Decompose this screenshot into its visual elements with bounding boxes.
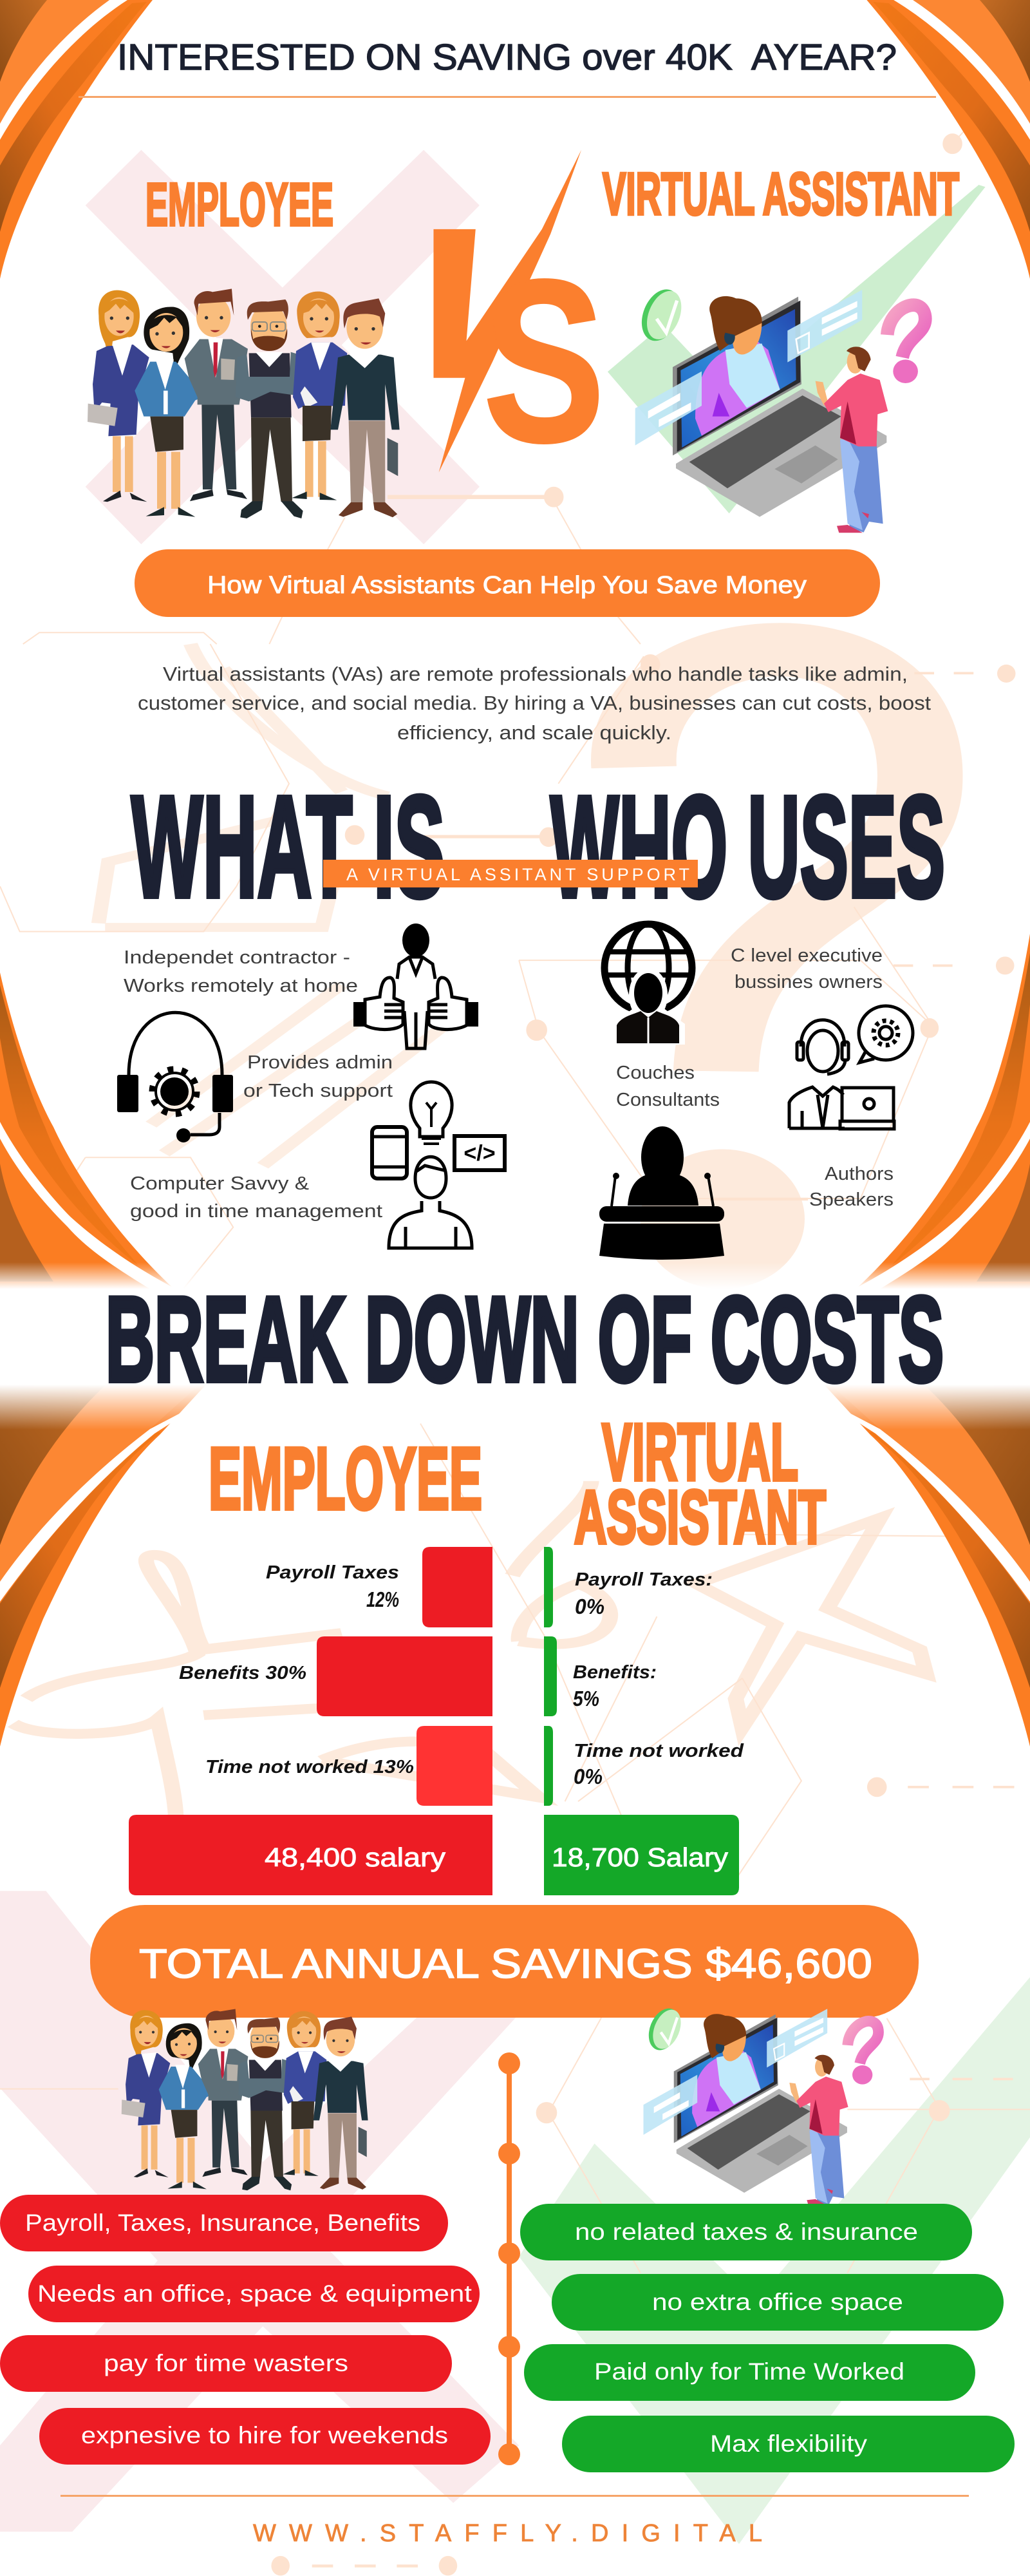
icon: speaker at podium: [599, 1126, 724, 1260]
bar: time not worked 0%: Time not worked: [574, 1741, 744, 1761]
text: authors speakers: Speakers: [809, 1189, 894, 1210]
icon: headset with gear: [117, 1012, 233, 1142]
text: computer savvy: good in time management: [130, 1201, 382, 1222]
pill: no related taxes: no related taxes & insurance: [575, 2219, 918, 2245]
heading: virtual assistant column: [574, 1408, 826, 1559]
icon: support agent with gear: [789, 1006, 913, 1129]
chart: employee cost bars: [129, 1547, 492, 1895]
bar: 48,400 salary: [129, 1815, 492, 1895]
background: pale pink X bottom: [0, 1891, 519, 2532]
text: computer savvy: [130, 1173, 382, 1222]
bar: payroll taxes 12%: Payroll Taxes: [266, 1562, 399, 1583]
pill: payroll taxes insurance benefits: [0, 2195, 448, 2251]
title: INTERESTED ON SAVING over 40K AYEAR?: [117, 37, 897, 78]
corner swoosh: lower right: [818, 1385, 1030, 1747]
pill: no extra office space: no extra office space: [652, 2289, 903, 2315]
VS emblem: [433, 150, 605, 491]
employee drawbacks list: [0, 2195, 491, 2465]
pill: no extra office space: [552, 2274, 1004, 2331]
timeline divider: [498, 2052, 520, 2465]
chart: virtual assistant cost bars: [544, 1547, 744, 1895]
text: couches consultants: Consultants: [616, 1090, 720, 1110]
intro paragraph: Virtual assistants (VAs) are remote professionals who handle tasks like admin,: [163, 663, 908, 685]
background: hand-drawn X outlines lower: [13, 1481, 926, 1863]
banner: total annual savings: TOTAL ANNUAL SAVINGS $46,600: [139, 1940, 872, 1987]
pill: no related taxes: [520, 2204, 972, 2260]
intro paragraph: [138, 663, 931, 744]
bar: benefits 5%: 5%: [573, 1687, 599, 1710]
tag: a virtual assistant support: [323, 860, 698, 887]
background: pale question mark: [633, 650, 920, 1289]
text: provides admin: [243, 1052, 393, 1101]
bar: 48,400 salary: 48,400 salary: [265, 1842, 446, 1872]
pill: paid only for time worked: Paid only for Time Worked: [594, 2358, 904, 2385]
heading: virtual assistant column: ASSISTANT: [574, 1475, 826, 1559]
corner swoosh: top left: [0, 0, 153, 279]
pill: pay for time wasters: pay for time wasters: [104, 2350, 348, 2376]
bar: time not worked 0%: [544, 1726, 744, 1806]
footer rule: [61, 2495, 969, 2497]
text: c level executive: bussines owners: [735, 972, 883, 992]
footer website: WWW.STAFFLY.DIGITAL: [253, 2520, 762, 2547]
background: pale green check top: [608, 185, 986, 513]
heading: virtual assistant column: VIRTUAL: [602, 1408, 798, 1497]
pill: payroll taxes insurance benefits: Payroll, Taxes, Insurance, Benefits: [25, 2210, 420, 2236]
pill: pay for time wasters: [0, 2335, 452, 2392]
text: provides admin: or Tech support: [243, 1081, 393, 1101]
heading: employee: EMPLOYEE: [145, 171, 333, 239]
icon: person thumbs up: [353, 923, 478, 1048]
bar: payroll taxes 12%: [266, 1547, 492, 1627]
pill: max flexibility: [562, 2416, 1015, 2472]
background: pale pink X top: [86, 150, 480, 544]
banner: how VAs help: How Virtual Assistants Can Help You Save Money: [207, 572, 807, 599]
bar: 18,700 salary: 18,700 Salary: [552, 1842, 729, 1872]
bar: payroll taxes 0%: 0%: [575, 1595, 604, 1618]
banner: how VAs help: [135, 549, 880, 617]
background: network dots and dashes: [271, 133, 1016, 2575]
bar: time not worked 13%: [205, 1726, 492, 1806]
text: independent contractor: [124, 947, 358, 996]
icon: tech worker with bulb and code: </>: [464, 1141, 496, 1166]
intro paragraph: customer service, and social media. By hiring a VA, businesses can cut costs, boost: [138, 692, 931, 714]
icon: executive with globe: [604, 924, 692, 1045]
pill: needs an office: [28, 2266, 480, 2322]
illustration: virtual assistant laptop: [635, 283, 925, 533]
corner swoosh: middle left: [0, 972, 187, 1298]
bar: time not worked 0%: 0%: [574, 1765, 603, 1788]
bar: benefits 30%: [179, 1636, 492, 1716]
text: independent contractor: Works remotely at home: [124, 976, 358, 996]
text: couches consultants: [616, 1063, 720, 1110]
tag: a virtual assistant support: A VIRTUAL ASSITANT SUPPORT: [346, 865, 689, 884]
icon: tech worker with bulb and code: [372, 1082, 505, 1248]
VS emblem: S: [483, 232, 605, 491]
illustration: virtual assistant laptop small: [643, 2003, 879, 2206]
bar: time not worked 13%: Time not worked 13%: [205, 1757, 414, 1777]
bar: benefits 30%: Benefits 30%: [179, 1663, 306, 1683]
intro paragraph: efficiency, and scale quickly.: [397, 721, 671, 744]
banner: total annual savings: [90, 1905, 919, 2018]
text: independent contractor: Independet contractor -: [124, 947, 350, 968]
text: couches consultants: Couches: [616, 1063, 695, 1083]
virtual assistant benefits list: [520, 2204, 1015, 2472]
pill: paid only for time worked: [524, 2344, 975, 2401]
text: authors speakers: [809, 1164, 894, 1210]
pill: max flexibility: Max flexibility: [710, 2430, 868, 2457]
bar: benefits 5%: [544, 1636, 657, 1716]
title rule: [79, 96, 936, 98]
background: hand-drawn X outlines middle: [98, 644, 460, 1166]
corner swoosh: top right: [866, 0, 1030, 279]
text: c level executive: [731, 945, 883, 992]
text: computer savvy: Computer Savvy &: [130, 1173, 309, 1194]
corner swoosh: lower left: [0, 1385, 212, 1747]
pill: expensive for weekends: expnesive to hire for weekends: [81, 2422, 448, 2448]
background: pale green check bottom: [519, 1977, 1030, 2544]
illustration: employee team small: [122, 2009, 368, 2190]
pill: expensive for weekends: [39, 2408, 491, 2465]
text: provides admin: Provides admin: [247, 1052, 393, 1073]
bar: benefits 5%: Benefits:: [573, 1662, 657, 1683]
heading: what is / who uses: WHAT IS: [131, 766, 445, 927]
white fade band: [0, 1262, 1030, 1430]
bar: payroll taxes 12%: 12%: [366, 1587, 399, 1611]
text: authors speakers: Authors: [825, 1164, 894, 1184]
text: c level executive: C level executive: [731, 945, 883, 966]
corner swoosh: middle right: [843, 934, 1030, 1298]
pill: needs an office: Needs an office, space & equipment: [37, 2280, 473, 2307]
heading: employee column: EMPLOYEE: [209, 1430, 482, 1528]
illustration: employee team: [88, 289, 400, 518]
bar: 18,700 salary: [544, 1815, 739, 1895]
bar: payroll taxes 0%: [544, 1547, 713, 1627]
bar: payroll taxes 0%: Payroll Taxes:: [575, 1569, 713, 1590]
